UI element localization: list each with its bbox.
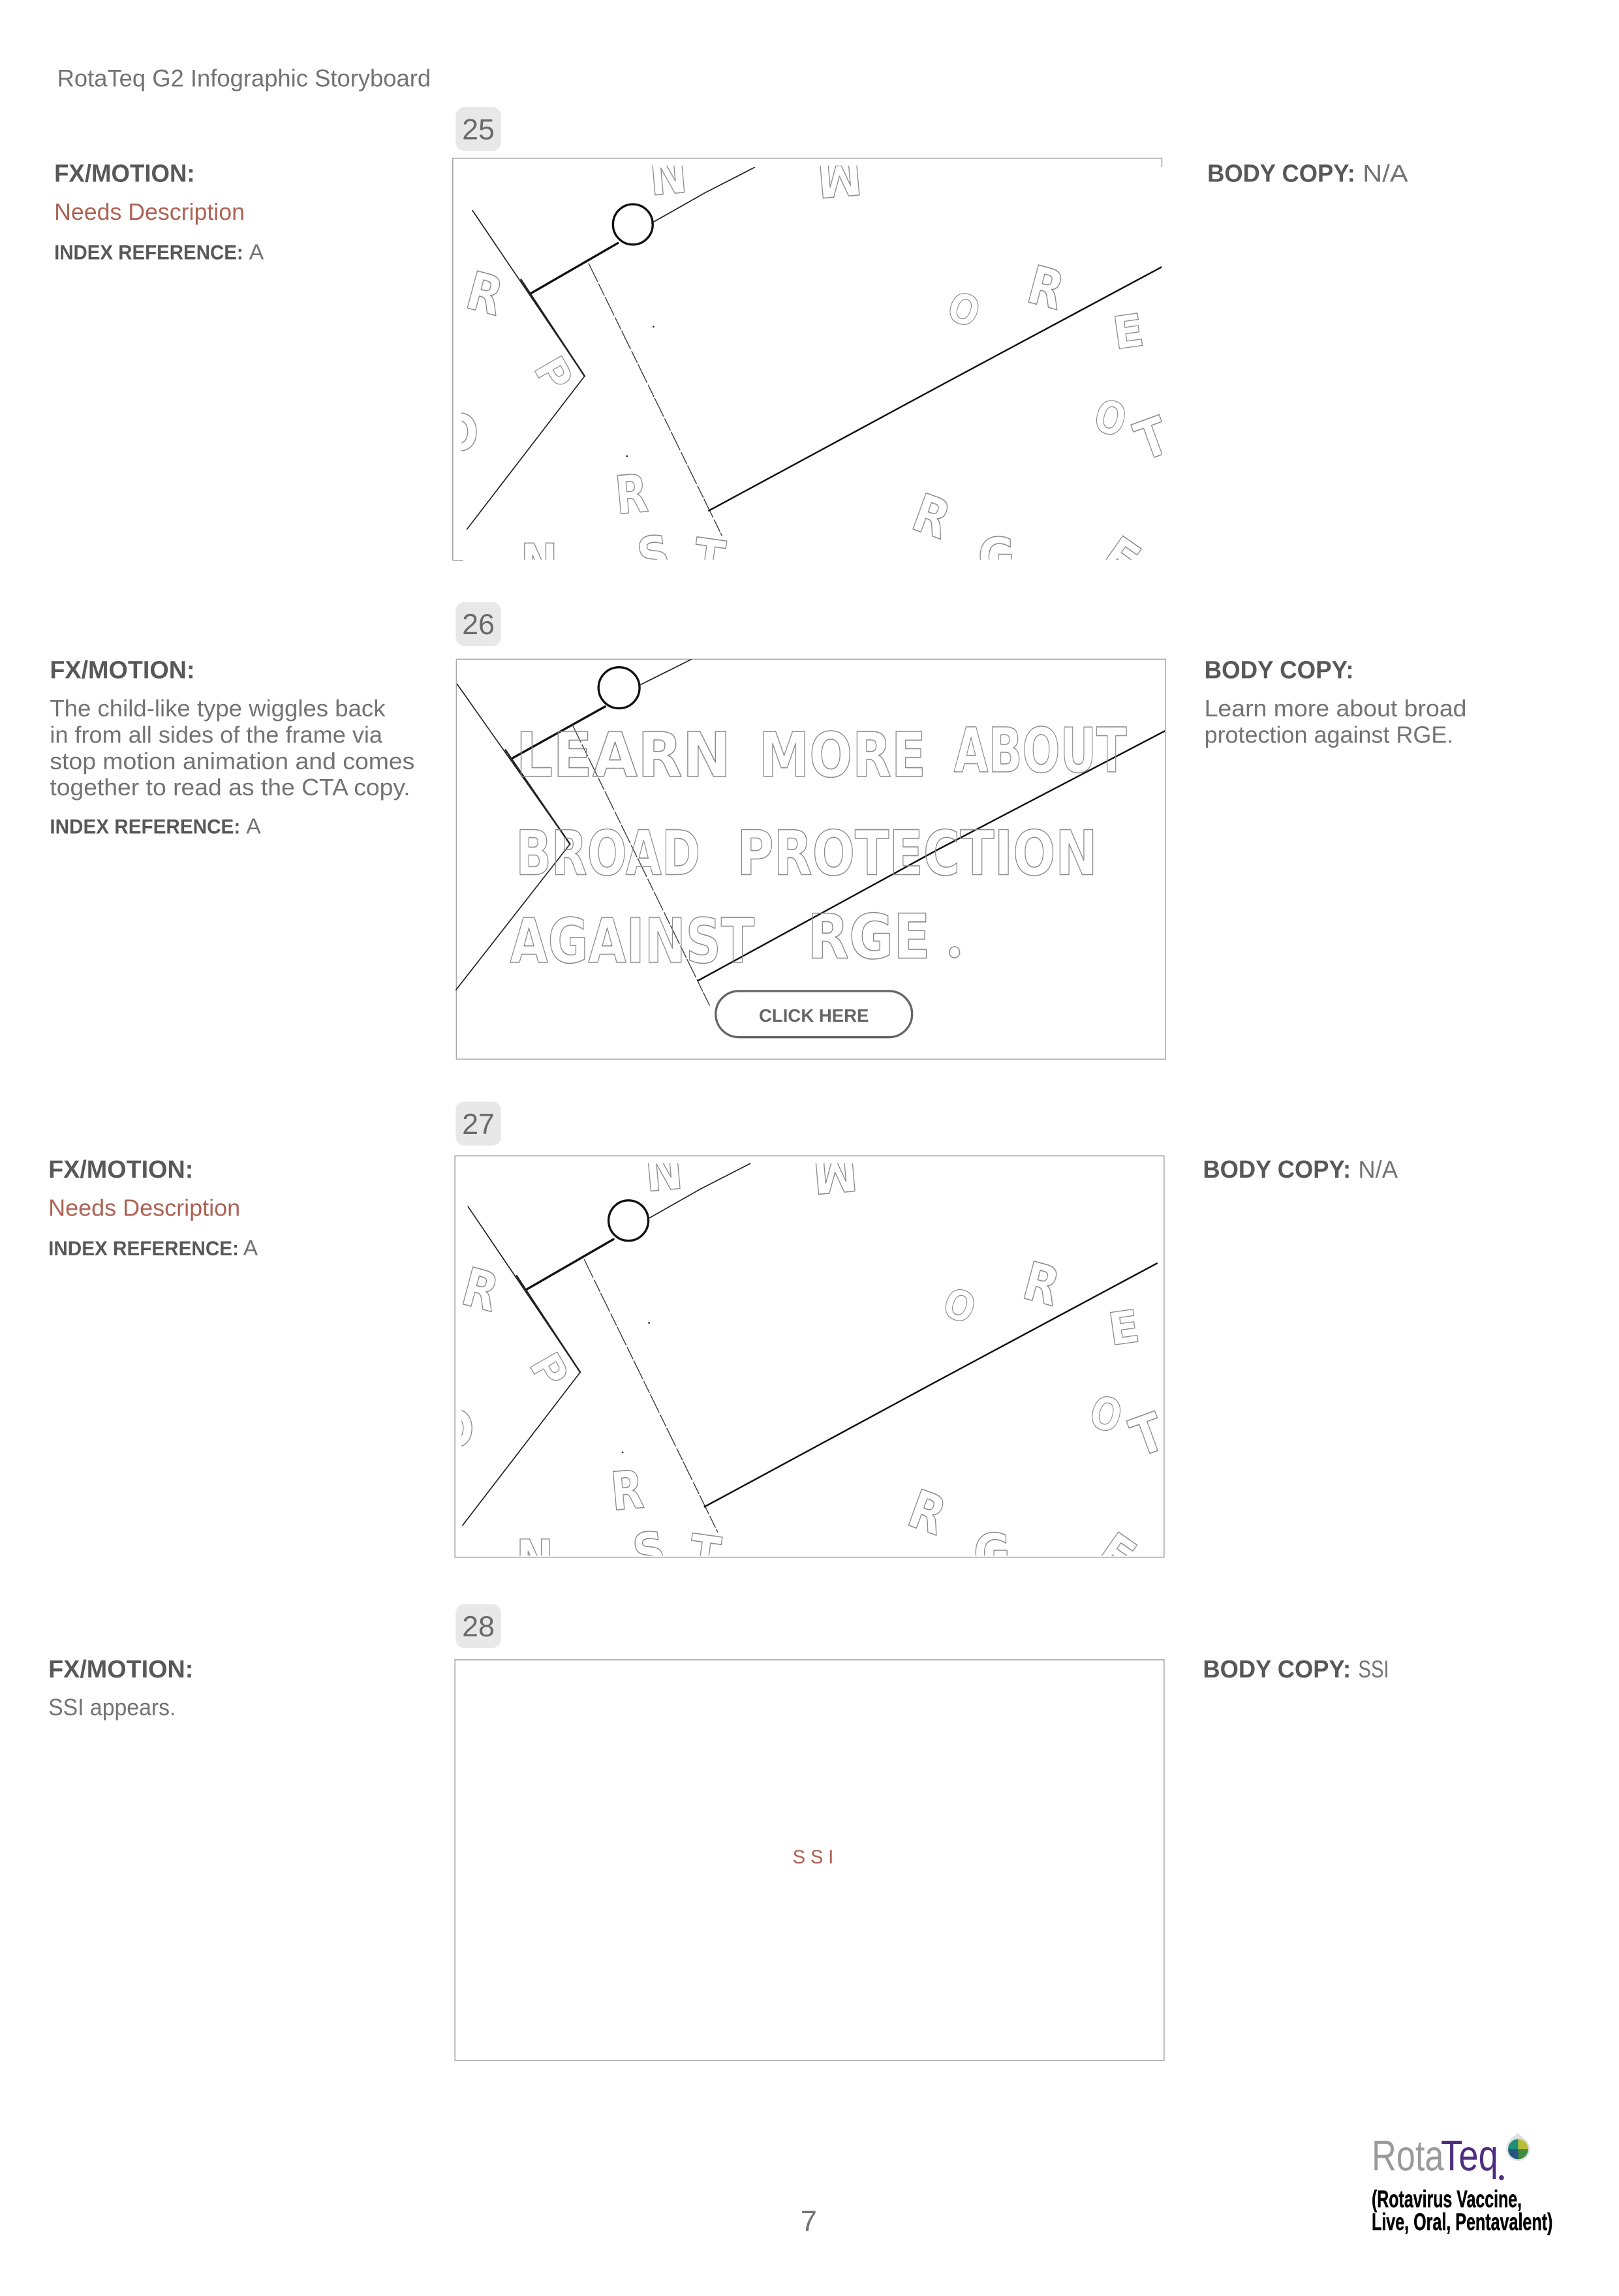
scattered bubble letters <box>461 1163 1158 1555</box>
call to action hand lettering: BROAD <box>516 818 700 889</box>
call to action hand lettering <box>510 715 1127 977</box>
logo descriptor <box>1372 2185 1552 2235</box>
scattered bubble letters: N <box>521 532 558 594</box>
badge: 25 <box>455 107 501 151</box>
logo wordmark: Rota <box>1372 2132 1444 2180</box>
left notes: 25: A <box>249 240 264 264</box>
left notes: 25: INDEX REFERENCE: <box>54 241 243 264</box>
scattered bubble letters <box>461 166 1162 560</box>
scattered bubble letters: O <box>1089 389 1132 448</box>
scattered bubble letters: E <box>1109 304 1147 360</box>
panel: frame 25 <box>54 107 1408 594</box>
title: RotaTeq G2 Infographic Storyboard <box>57 64 431 91</box>
right copy: 25: BODY COPY: <box>1207 159 1355 187</box>
scattered bubble letters: E <box>1105 1300 1143 1356</box>
panel: frame 27 <box>48 1101 1398 1591</box>
scattered bubble letters: O <box>937 1278 982 1334</box>
scattered bubble letters: R <box>455 1255 505 1324</box>
scattered bubble letters: M <box>810 1140 860 1205</box>
button: click here: CLICK HERE <box>759 1005 869 1026</box>
left notes: 26: together to read as the CTA copy. <box>50 774 410 801</box>
left notes: 27: A <box>243 1236 258 1261</box>
left notes: 25 <box>54 159 264 264</box>
left notes: 26: INDEX REFERENCE: <box>50 816 240 838</box>
scattered bubble letters: R <box>1017 1249 1066 1319</box>
call to action hand lettering: AGAINST <box>510 906 754 977</box>
scattered bubble letters: P <box>519 1345 578 1396</box>
scattered bubble letters: R <box>613 463 651 527</box>
right copy: 26: protection against RGE. <box>1205 721 1453 748</box>
right copy: 26: BODY COPY: <box>1205 656 1354 684</box>
left notes: 26: stop motion animation and comes <box>50 748 414 774</box>
right copy: 25: N/A <box>1363 159 1408 187</box>
scattered bubble letters: T <box>1127 405 1177 473</box>
left notes: 26: The child-like type wiggles back <box>50 695 386 722</box>
call to action hand lettering: PROTECTION <box>737 818 1098 889</box>
left notes: 27: FX/MOTION: <box>48 1156 193 1184</box>
sketch frame: 28 <box>455 1660 1164 2060</box>
badge: 27: 27 <box>462 1107 495 1140</box>
scattered bubble letters: R <box>901 1478 954 1548</box>
panel: frame 28 <box>48 1604 1389 2060</box>
stick figure lines <box>463 1163 1157 1533</box>
left notes: 26: A <box>246 815 261 839</box>
left notes: 28 <box>48 1655 193 1721</box>
logo: RotaTeq <box>1372 2132 1552 2235</box>
scattered bubble letters: R <box>608 1460 646 1523</box>
left notes: 25: Needs Description <box>54 198 245 225</box>
logo descriptor: (Rotavirus Vaccine, <box>1372 2185 1522 2212</box>
scattered bubble letters: N <box>516 1529 553 1591</box>
right copy: 27: N/A <box>1358 1156 1398 1183</box>
call to action hand lettering: ABOUT <box>954 715 1127 787</box>
scattered bubble letters: R <box>905 482 959 551</box>
left notes: 28: FX/MOTION: <box>48 1655 193 1683</box>
left notes: 25: FX/MOTION: <box>54 159 195 187</box>
sketch frame: 28: SSI <box>793 1847 839 1868</box>
badge: 27 <box>455 1101 501 1146</box>
scattered bubble letters: P <box>524 348 581 400</box>
call to action hand lettering: LEARN <box>516 720 731 791</box>
scattered bubble letters: R <box>460 260 510 328</box>
right copy: 27: BODY COPY: <box>1203 1156 1351 1184</box>
sketch frame: 25 <box>452 158 1163 561</box>
right copy: 28: BODY COPY: <box>1203 1655 1351 1683</box>
scattered bubble letters: T <box>1122 1401 1173 1469</box>
scattered bubble letters: T <box>690 526 728 592</box>
scattered bubble letters: O <box>1085 1385 1128 1444</box>
sketch frame: 27 <box>454 1155 1165 1558</box>
left notes: 27: Needs Description <box>48 1195 240 1221</box>
badge: 26 <box>455 602 501 646</box>
scattered bubble letters: M <box>814 144 865 209</box>
left notes: 26: FX/MOTION: <box>50 656 195 684</box>
scattered bubble letters: O <box>942 282 987 337</box>
badge: 26: 26 <box>462 607 495 641</box>
scattered bubble letters: E <box>1090 525 1150 593</box>
call to action hand lettering: RGE <box>807 901 931 973</box>
page number: 7 <box>801 2205 817 2238</box>
badge: 28: 28 <box>462 1610 495 1643</box>
icon: colour drop <box>1506 2133 1530 2161</box>
stick figure lines <box>467 168 1161 536</box>
scattered bubble letters: S <box>633 523 674 589</box>
left notes: 26: in from all sides of the frame via <box>50 721 382 748</box>
scattered bubble letters: N <box>647 141 690 206</box>
scattered bubble letters: G <box>974 1523 1010 1585</box>
scattered bubble letters: D <box>441 402 479 464</box>
badge: 28 <box>455 1604 501 1648</box>
right copy: 28: SSI <box>1358 1655 1389 1683</box>
scattered bubble letters: G <box>978 527 1015 589</box>
left notes: 27 <box>48 1156 258 1261</box>
scattered bubble letters: N <box>642 1137 685 1202</box>
logo wordmark: Teq <box>1441 2132 1498 2180</box>
call to action hand lettering: MORE <box>759 720 926 791</box>
scattered bubble letters: T <box>685 1522 724 1588</box>
panel: frame 26 <box>50 602 1466 1059</box>
button: click here <box>716 991 912 1037</box>
stick figure lines <box>455 659 1165 1005</box>
scattered bubble letters: S <box>629 1519 670 1585</box>
left notes: 28: SSI appears. <box>48 1694 176 1721</box>
left notes: 27: INDEX REFERENCE: <box>48 1237 239 1260</box>
scattered bubble letters: R <box>1021 254 1071 322</box>
right copy: 26: Learn more about broad <box>1205 695 1466 722</box>
sketch frame: 26 <box>455 659 1165 1059</box>
badge: 25: 25 <box>462 112 495 145</box>
scattered bubble letters: D <box>437 1398 474 1460</box>
left notes: 26 <box>50 656 414 839</box>
scattered bubble letters: E <box>1086 1521 1147 1589</box>
right copy: 26 <box>1205 656 1466 748</box>
